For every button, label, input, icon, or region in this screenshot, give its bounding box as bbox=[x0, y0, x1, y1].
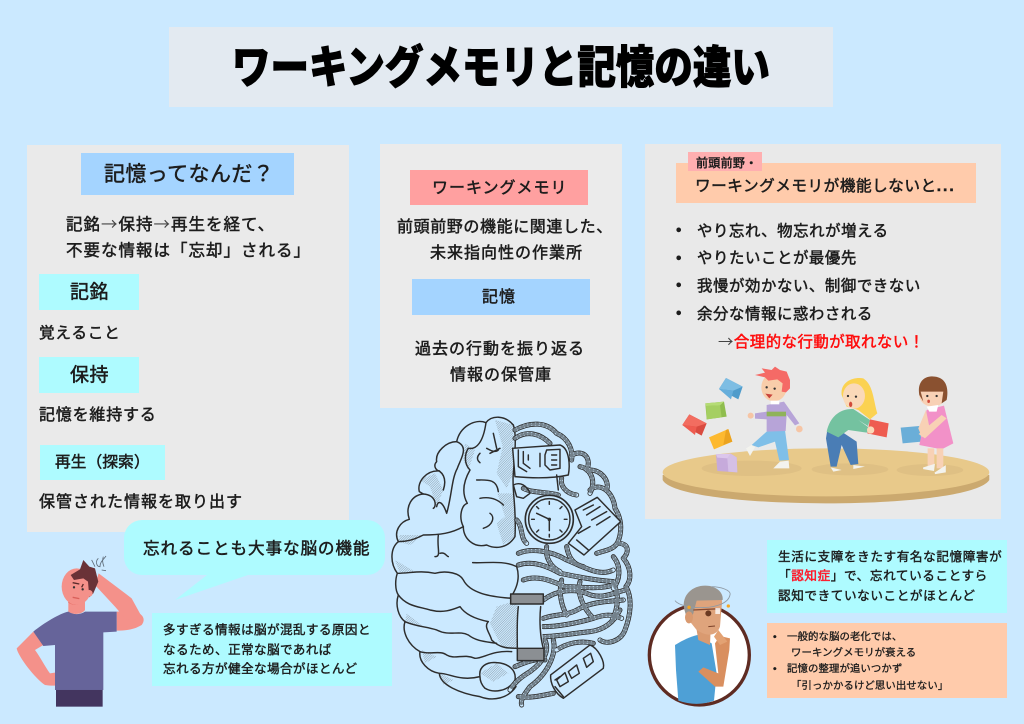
text: memory description: 過去の行動を振り返る bbox=[415, 341, 585, 358]
list: symptoms: やり忘れ、物忘れが増える bbox=[697, 223, 889, 240]
callout: too much information: 忘れる方が健全な場合がほとんど bbox=[163, 662, 358, 676]
list: symptoms: • bbox=[676, 250, 681, 267]
text: memory description: 情報の保管庫 bbox=[450, 367, 552, 384]
label: retention bbox=[39, 357, 139, 393]
text: working memory description: 未来指向性の作業所 bbox=[430, 245, 583, 262]
callout: normal brain ageing: 一般的な脳の老化では、 bbox=[787, 632, 902, 643]
callout: normal brain ageing: ワーキングメモリが衰える bbox=[791, 648, 916, 659]
heading: memory bbox=[412, 279, 590, 315]
callout: normal brain ageing bbox=[767, 623, 1007, 698]
illustration: children and blocks bbox=[663, 367, 989, 503]
paper module bbox=[568, 497, 621, 555]
bubble text: 忘れることも大事な脳の機能 bbox=[143, 539, 370, 558]
label: encoding: 記銘 bbox=[70, 282, 109, 303]
illustration: brain bbox=[392, 417, 630, 705]
power strip bbox=[551, 645, 604, 698]
callout: dementia: 「認知症」で、忘れていることすら bbox=[778, 568, 988, 582]
label: retrieval bbox=[40, 445, 165, 480]
illustration: elderly man bbox=[649, 586, 749, 705]
callout: normal brain ageing: • bbox=[773, 664, 777, 675]
text: memory description bbox=[415, 340, 585, 384]
tag: prefrontal cortex: 前頭前野・ bbox=[696, 156, 758, 170]
text: encoding description: 覚えること bbox=[39, 325, 121, 342]
callout: normal brain ageing: 記憶の整理が追いつかず bbox=[787, 664, 902, 675]
label: retention: 保持 bbox=[70, 365, 109, 386]
heading: working memory bbox=[410, 170, 588, 205]
panel: what is memory bbox=[27, 145, 349, 532]
list: symptoms: • bbox=[676, 305, 681, 322]
text: memory overview: 記銘→保持→再生を経て、 bbox=[66, 211, 275, 235]
callout: dementia bbox=[767, 540, 1007, 613]
heading: when working memory fails: ワーキングメモリが機能しないと... bbox=[695, 178, 956, 194]
list: symptoms bbox=[676, 222, 921, 323]
panel: working memory vs memory bbox=[380, 144, 622, 408]
cylinder bbox=[517, 607, 543, 648]
heading: memory: 記憶 bbox=[482, 289, 516, 306]
list: symptoms: やりたいことが最優先 bbox=[697, 250, 857, 267]
label: encoding bbox=[39, 274, 139, 310]
label: retrieval: 再生（探索） bbox=[55, 454, 150, 471]
text: retrieval description: 保管された情報を取り出す bbox=[39, 494, 243, 511]
text: memory overview: 不要な情報は「忘却」される」 bbox=[66, 242, 311, 260]
heading: what is memory: 記憶ってなんだ？ bbox=[104, 162, 274, 186]
text: working memory description: 前頭前野の機能に関連した、 bbox=[397, 219, 613, 236]
list: symptoms: 我慢が効かない、制御できない bbox=[697, 278, 921, 295]
heading: working memory: ワーキングメモリ bbox=[432, 180, 568, 196]
brain hatching bbox=[395, 420, 517, 685]
tag: prefrontal cortex bbox=[688, 152, 762, 171]
text: retention description: 記憶を維持する bbox=[39, 407, 157, 424]
text: working memory description bbox=[397, 218, 613, 262]
callout: dementia: 認知できていないことがほとんど bbox=[778, 588, 976, 602]
text: memory overview bbox=[66, 211, 311, 260]
illustration: confused man bbox=[17, 556, 144, 707]
list: symptoms: 余分な情報に惑わされる bbox=[697, 306, 873, 323]
callout: normal brain ageing: • bbox=[773, 632, 777, 643]
callout: too much information: 多すぎる情報は脳が混乱する原因と bbox=[163, 623, 371, 637]
panel: when working memory fails bbox=[645, 144, 1001, 519]
list: symptoms: • bbox=[676, 277, 681, 294]
clock bbox=[525, 495, 573, 543]
heading: what is memory bbox=[81, 153, 294, 195]
callout: normal brain ageing: 「引っかかるけど思い出せない」 bbox=[791, 681, 948, 692]
callout: dementia: 生活に支障をきたす有名な記憶障害が bbox=[778, 550, 1002, 564]
circuit box bbox=[513, 445, 569, 478]
title text: ワーキングメモリと記憶の違い bbox=[232, 43, 770, 93]
list: symptoms: • bbox=[676, 222, 681, 239]
gear bbox=[513, 484, 530, 498]
callout: too much information: なるため、正常な脳であれば bbox=[163, 643, 332, 657]
callout: irrational behaviour: →合理的な行動が取れない！ bbox=[718, 330, 925, 352]
heading: when working memory fails bbox=[676, 163, 976, 203]
tangled wires bbox=[510, 424, 630, 705]
title banner bbox=[169, 27, 833, 107]
callout: too much information bbox=[152, 613, 392, 686]
